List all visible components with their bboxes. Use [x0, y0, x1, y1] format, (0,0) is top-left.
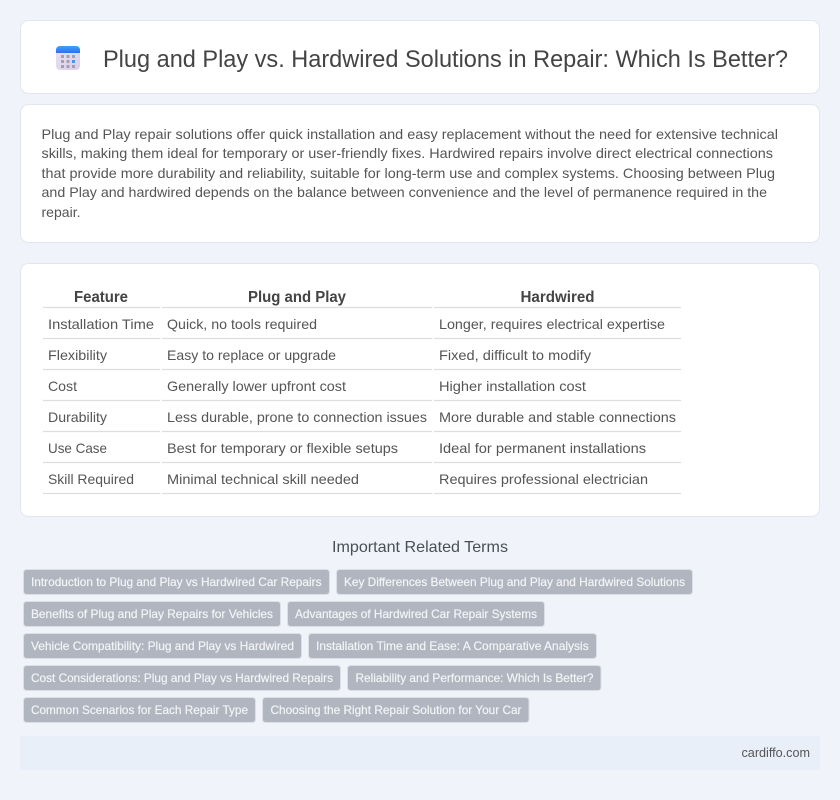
panel: intro text: Plug and Play repair solutions offer quick installation and easy replacement without the need for extensive technical [42, 126, 778, 142]
row: flexibility [48, 347, 591, 363]
row: use case: Ideal for permanent installations [439, 440, 646, 456]
row: skill required: Minimal technical skill needed [167, 471, 359, 487]
row: flexibility: Flexibility [48, 347, 107, 363]
row: flexibility: Fixed, difficult to modify [439, 347, 591, 363]
row: durability [48, 409, 676, 425]
table header: Feature [74, 289, 128, 306]
panel: intro text: that provide more durability and reliability, suitable for long-term use and complex systems. Choosing between Plug [42, 165, 775, 181]
icon: calendar [56, 46, 80, 70]
row: cost: Cost [48, 378, 77, 394]
heading: related terms: Important Related Terms [332, 539, 508, 556]
related term tags: Installation Time and Ease: A Comparative Analysis [316, 639, 589, 653]
row: durability: More durable and stable connections [439, 409, 676, 425]
related term tags: Benefits of Plug and Play Repairs for Vehicles [31, 607, 273, 621]
panel: intro text: repair. [42, 204, 80, 220]
row: flexibility: Easy to replace or upgrade [167, 347, 336, 363]
related term tags: Introduction to Plug and Play vs Hardwired Car Repairs [31, 575, 322, 589]
row: durability: Durability [48, 409, 107, 425]
panel: intro text: and Play and hardwired depends on the balance between convenience and the level of permanence required in the [42, 184, 767, 200]
row: use case: Use Case [48, 440, 107, 456]
row: cost [48, 378, 586, 394]
row: cost: Generally lower upfront cost [167, 378, 346, 394]
related term tags: Advantages of Hardwired Car Repair Systems [295, 607, 537, 621]
row: installation time: Longer, requires electrical expertise [439, 316, 665, 332]
related term tags: Common Scenarios for Each Repair Type [31, 703, 248, 717]
related term tags: Choosing the Right Repair Solution for Your Car [270, 703, 522, 717]
related term tags: Cost Considerations: Plug and Play vs Hardwired Repairs [31, 671, 333, 685]
row: use case: Best for temporary or flexible setups [167, 440, 398, 456]
panel: intro text [20, 104, 820, 242]
row: skill required: Requires professional electrician [439, 471, 648, 487]
table header: Plug and Play [248, 289, 346, 306]
title: Plug and Play vs. Hardwired Solutions in Repair: Which Is Better? [103, 46, 788, 73]
row: cost: Higher installation cost [439, 378, 586, 394]
row: durability: Less durable, prone to connection issues [167, 409, 427, 425]
table header: Hardwired [520, 289, 594, 306]
table header [74, 289, 594, 306]
related term tags: Reliability and Performance: Which Is Better? [356, 671, 594, 685]
row: use case [48, 440, 646, 456]
row: skill required: Skill Required [48, 471, 134, 487]
row: skill required [48, 471, 648, 487]
related term tags [24, 570, 692, 722]
row: installation time [48, 316, 665, 332]
panel: comparison table [20, 264, 820, 516]
related term tags: Key Differences Between Plug and Play and Hardwired Solutions [344, 575, 685, 589]
footer [20, 736, 820, 770]
footer: cardiffo.com [742, 745, 810, 760]
panel: intro text: skills, making them ideal for temporary or user-friendly fixes. Hardwired repairs involve direct electrical connections [42, 145, 773, 161]
row: installation time: Installation Time [48, 316, 154, 332]
row: installation time: Quick, no tools required [167, 316, 317, 332]
related term tags: Vehicle Compatibility: Plug and Play vs Hardwired [31, 639, 294, 653]
header card [20, 20, 820, 94]
